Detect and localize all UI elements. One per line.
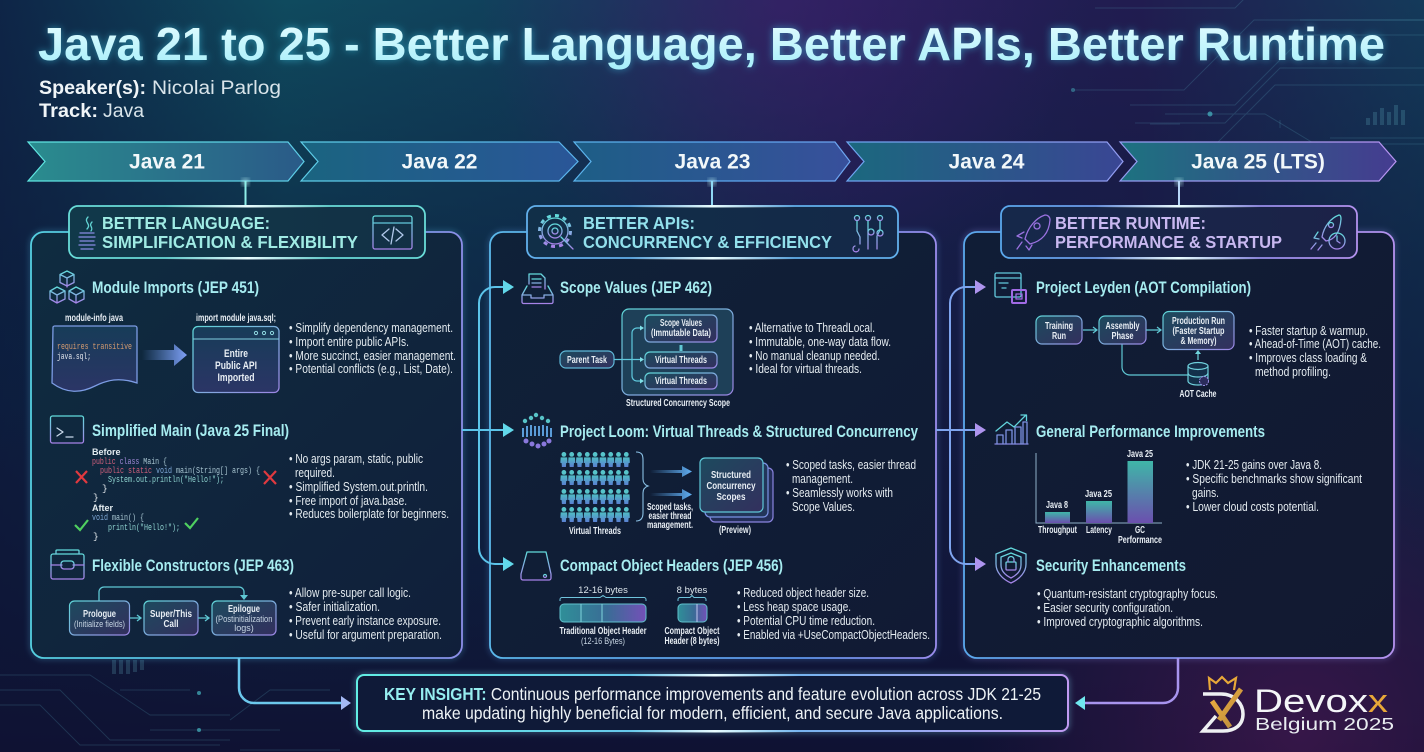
heading: module imports: Module Imports (JEP 451) [92, 278, 259, 297]
bullets: project loom: • Seamlessly works with [786, 486, 893, 500]
diagram: traditional header [560, 585, 647, 646]
diagram: traditional header: Traditional Object Header [560, 626, 647, 637]
bullets: module imports: • Import entire public APIs. [289, 335, 409, 349]
arrow: module to import [142, 344, 187, 366]
callout text line 2: make updating highly beneficial for modern, efficient, and secure Java applications. [422, 703, 1003, 723]
stack: structured concurrency scopes [700, 458, 773, 522]
bullets: project leyden [1249, 324, 1381, 379]
heading: flexible constructors: Flexible Constructors (JEP 463) [92, 556, 294, 575]
diagram: structured concurrency scope: Virtual Threads [655, 355, 707, 366]
icon: java cup [79, 217, 95, 249]
icon: gear with magnifier [540, 216, 573, 249]
panel: better runtime [964, 205, 1394, 658]
code: before and after: Before [92, 447, 121, 457]
icon: green check right [185, 518, 198, 528]
bullets: simplified main: • Reduces boilerplate for beginners. [289, 507, 449, 521]
flow diagram: constructor: Prologue [83, 609, 116, 620]
chevron: Java 24: Java 24 [949, 150, 1025, 174]
panel heading: better runtime: PERFORMANCE & STARTUP [1055, 232, 1282, 252]
caption: scoped tasks: easier thread [648, 511, 692, 522]
speaker line: Nicolai Parlog [152, 78, 281, 99]
chevron: Java 23: Java 23 [675, 150, 750, 174]
logo mark [1203, 677, 1243, 731]
icon: red cross left [76, 471, 87, 483]
panel heading: better language [69, 205, 425, 260]
caption: scoped tasks: Scoped tasks, [647, 502, 693, 513]
section: security [996, 548, 1218, 629]
diagram: module-info: java.sql; [57, 351, 91, 362]
flow diagram: AOT: Production Run [1172, 316, 1225, 327]
chevron: Java 21: Java 21 [129, 150, 205, 174]
diagram: public API window: Entire [224, 348, 248, 360]
icon: rocket with clock [1311, 215, 1345, 250]
flow diagram: AOT: Phase [1112, 331, 1134, 342]
heading: security: Security Enhancements [1036, 556, 1186, 575]
bullets: flexible constructors [289, 586, 442, 642]
flow diagram: constructor: Super/This [150, 609, 192, 620]
bullets: flexible constructors: • Safer initialization. [289, 600, 380, 614]
bullets: simplified main: • No args param, static, public [289, 452, 423, 466]
bullets: simplified main: • Free import of java.base. [289, 494, 407, 508]
diagram: structured concurrency scope: Structured Concurrency Scope [626, 398, 730, 409]
section: project leyden [995, 273, 1381, 400]
bullets: project leyden: • Ahead-of-Time (AOT) cache. [1249, 337, 1381, 351]
panel heading: better APIs [527, 205, 898, 260]
flow diagram: constructor: logs) [234, 623, 254, 633]
chevron: Java 21 [28, 142, 304, 181]
section: module imports [50, 271, 456, 392]
bullets: general performance: • Specific benchmarks show significant [1186, 472, 1362, 486]
icon: rocket [1017, 215, 1050, 250]
bullets: scope values: • Immutable, one-way data flow. [749, 335, 891, 349]
icon: toolbox [51, 550, 84, 579]
bar chart: Java 8 vs Java 25 [1036, 449, 1162, 546]
bullets: scope values: • No manual cleanup needed. [749, 349, 880, 363]
code: before and after: println("Hello!"); [108, 522, 180, 533]
diagram: module-info [52, 313, 137, 391]
icon: cubes [50, 271, 84, 303]
speaker line [39, 78, 281, 99]
heading: general performance: General Performance Improvements [1036, 422, 1265, 441]
callout: key insight [357, 674, 1068, 732]
logo: Devoxx Belgium 2025 [1203, 677, 1394, 734]
track line: Java [103, 101, 144, 122]
diagram: public API window: import module java.sql; [196, 313, 276, 324]
bullets: flexible constructors: • Allow pre-super call logic. [289, 586, 411, 600]
bullets: compact object headers [737, 586, 930, 642]
section: simplified main [50, 416, 449, 542]
bullets: module imports [289, 321, 456, 376]
icon: inbox tray [522, 274, 553, 304]
section: project loom [522, 413, 918, 537]
bullets: scope values [749, 321, 891, 376]
diagram: traditional header: (12-16 Bytes) [581, 636, 625, 646]
heading text: better language: BETTER LANGUAGE: [102, 213, 270, 233]
heading text: better APIs: BETTER APIs: [583, 213, 695, 233]
stack: structured concurrency scopes: Concurrency [706, 480, 756, 492]
bullets: project loom [786, 458, 916, 514]
diagram: compact header: Compact Object [664, 626, 720, 637]
icon: code window [373, 216, 412, 249]
bullets: module imports: • Potential conflicts (e.g., List, Date). [289, 362, 453, 376]
flow diagram: AOT [1036, 312, 1234, 400]
timeline [28, 142, 1396, 181]
code: before and after: public static void main(String[] args) { [100, 465, 260, 476]
diagram: traditional header: 12-16 bytes [578, 585, 628, 596]
bar chart: Java 8 vs Java 25: Java 25 [1085, 489, 1112, 500]
icon: thread crowd [522, 413, 552, 448]
code: before and after: public class Main { [92, 456, 167, 467]
section: compact object headers [521, 552, 930, 647]
heading: project leyden: Project Leyden (AOT Compilation) [1036, 278, 1251, 297]
flow diagram: constructor [70, 587, 276, 635]
bullets: security: • Easier security configuration. [1037, 601, 1173, 615]
heading text: better runtime: BETTER RUNTIME: [1055, 213, 1206, 233]
flow diagram: constructor: Epilogue [228, 604, 260, 615]
bullets: simplified main: • Simplified System.out.println. [289, 480, 428, 494]
diagram: module-info: module-info java [65, 313, 123, 324]
label: preview: (Preview) [719, 525, 751, 536]
diagram: public API window [193, 313, 279, 392]
bullets: flexible constructors: • Useful for argument preparation. [289, 628, 442, 642]
section: scope values [522, 274, 891, 409]
panel heading: better language: SIMPLIFICATION & FLEXIBILITY [102, 232, 358, 252]
connector: Java 23 to APIs header [709, 179, 715, 207]
heading: simplified main: Simplified Main (Java 25 Final) [92, 421, 289, 440]
bullets: security: • Improved cryptographic algorithms. [1037, 615, 1203, 629]
bullets: security: • Quantum-resistant cryptography focus. [1037, 587, 1218, 601]
speaker line: Speaker(s): [39, 78, 146, 99]
diagram: structured concurrency scope: (Immutable Data) [651, 328, 711, 339]
bar chart: Java 8 vs Java 25: Java 25 [1127, 449, 1153, 460]
stack: structured concurrency scopes: Structured [711, 469, 751, 481]
diagram: structured concurrency scope [560, 309, 733, 409]
bullets: general performance: gains. [1192, 486, 1219, 500]
icon: window with chip [995, 273, 1026, 303]
diagram: public API window: Public API [215, 360, 257, 372]
heading: project loom: Project Loom: Virtual Threads & Structured Concurrency [560, 422, 918, 441]
diagram: structured concurrency scope: Parent Task [567, 355, 607, 366]
chevron: Java 25 LTS [1120, 142, 1396, 181]
icon: terminal [50, 416, 84, 443]
arrow: language panel to key insight [239, 658, 351, 710]
icon: green check left [75, 520, 88, 530]
label: virtual threads: Virtual Threads [569, 526, 621, 537]
code: before and after: After [92, 503, 113, 513]
diagram: public API window: Imported [218, 372, 254, 384]
caption: scoped tasks [647, 502, 693, 531]
code: before and after: void main() { [92, 512, 144, 523]
panel: better APIs [490, 205, 936, 658]
logo wordmark: Devox x [1254, 683, 1388, 719]
bullets: flexible constructors: • Prevent early instance exposure. [289, 614, 441, 628]
diagram: module-info: requires transitive [57, 341, 132, 352]
diagram: structured concurrency scope: Scope Values [660, 318, 702, 329]
bullets: scope values: • Ideal for virtual threads. [749, 362, 862, 376]
arrows: threads to scopes [650, 466, 692, 500]
diagram: compact header: 8 bytes [677, 585, 708, 596]
bullets: compact object headers: • Less heap space usage. [737, 600, 851, 614]
bullets: project leyden: • Improves class loading & [1249, 351, 1368, 365]
flow diagram: AOT: AOT Cache [1180, 389, 1217, 400]
heading: scope values: Scope Values (JEP 462) [560, 278, 712, 297]
bar chart: Java 8 vs Java 25: Performance [1118, 535, 1162, 546]
heading: compact object headers: Compact Object Headers (JEP 456) [560, 556, 783, 575]
bullets: compact object headers: • Reduced object header size. [737, 586, 869, 600]
callout text line 1: KEY INSIGHT: Continuous performance improvements and feature evolution across JDK 21-25 [384, 684, 1041, 704]
connector: Java 21 to language header [242, 179, 248, 207]
flow diagram: constructor: Call [164, 619, 179, 630]
caption: scoped tasks: management. [647, 520, 693, 531]
flow diagram: constructor: (Postinitialization [216, 614, 272, 624]
arrow: runtime panel to key insight [1075, 658, 1178, 710]
chevron: Java 22: Java 22 [402, 150, 477, 174]
chevron: Java 24 [847, 142, 1123, 181]
bullets: project loom: • Scoped tasks, easier thread [786, 458, 916, 472]
bullets: project loom: Scope Values. [792, 500, 855, 514]
icon: red cross right [264, 471, 276, 484]
flow diagram: AOT: & Memory) [1180, 336, 1216, 347]
bullets: module imports: • More succinct, easier management. [289, 349, 456, 363]
icon: shield lock [996, 548, 1026, 583]
code: before and after: } [93, 531, 99, 542]
diagram: structured concurrency scope: Virtual Threads [655, 376, 707, 387]
chevron: Java 22 [301, 142, 578, 181]
code: before and after: } [102, 483, 108, 494]
bullets: project leyden: • Faster startup & warmup. [1249, 324, 1368, 338]
bullets: simplified main [289, 452, 449, 521]
panel: better language [31, 205, 462, 658]
panel heading: better APIs: CONCURRENCY & EFFICIENCY [583, 232, 832, 252]
icon: storage drive [521, 552, 551, 580]
diagram: compact header [664, 585, 720, 647]
flow diagram: AOT: (Faster Startup [1172, 326, 1224, 337]
icon grid: virtual threads [560, 452, 630, 522]
section: general performance [995, 415, 1362, 546]
code: before and after: System.out.println("Hello!"); [108, 474, 224, 485]
bar chart: Java 8 vs Java 25: Java 8 [1046, 500, 1068, 511]
bullets: general performance: • Lower cloud costs potential. [1186, 500, 1319, 514]
bullets: project loom: management. [792, 472, 853, 486]
bullets: module imports: • Simplify dependency management. [289, 321, 453, 335]
flow diagram: AOT: Run [1052, 331, 1066, 342]
code: before and after [92, 447, 260, 542]
bullets: general performance: • JDK 21-25 gains over Java 8. [1186, 458, 1322, 472]
flow diagram: AOT: Training [1045, 321, 1073, 332]
bullets: compact object headers: • Enabled via +UseCompactObjectHeaders. [737, 628, 930, 642]
connector: Java 25 to runtime header [1176, 179, 1182, 207]
section: flexible constructors [51, 550, 442, 642]
arrows: APIs panel to runtime sections [934, 280, 986, 571]
bullets: simplified main: required. [295, 466, 335, 480]
bullets: project leyden: method profiling. [1255, 365, 1331, 379]
bar chart: Java 8 vs Java 25: Throughput [1038, 525, 1077, 536]
stack: structured concurrency scopes: Scopes [716, 491, 746, 503]
track line: Track: [39, 101, 98, 122]
bracket [636, 452, 648, 521]
logo subtitle: Belgium 2025 [1255, 714, 1394, 734]
chevron: Java 23 [574, 142, 850, 181]
chevron: Java 25 LTS: Java 25 (LTS) [1191, 150, 1325, 174]
diagram: compact header: Header (8 bytes) [664, 636, 720, 647]
icon: growth chart [995, 415, 1028, 444]
bullets: security [1037, 587, 1218, 629]
arrows: language panel to APIs sections [460, 280, 514, 571]
track line [39, 101, 144, 122]
bullets: scope values: • Alternative to ThreadLocal. [749, 321, 875, 335]
flow diagram: constructor: (Initialize fields) [74, 619, 125, 629]
flow diagram: AOT: Assembly [1106, 321, 1140, 332]
bullets: compact object headers: • Potential CPU time reduction. [737, 614, 875, 628]
code: before and after: } [93, 492, 99, 503]
icon: threads hub [853, 216, 883, 252]
title: Java 21 to 25 - Better Language, Better APIs, Better Runtime [38, 18, 1385, 70]
bar chart: Java 8 vs Java 25: GC [1135, 525, 1145, 536]
panel heading: better runtime [1001, 205, 1357, 260]
bullets: general performance [1186, 458, 1362, 514]
bar chart: Java 8 vs Java 25: Latency [1086, 525, 1112, 536]
